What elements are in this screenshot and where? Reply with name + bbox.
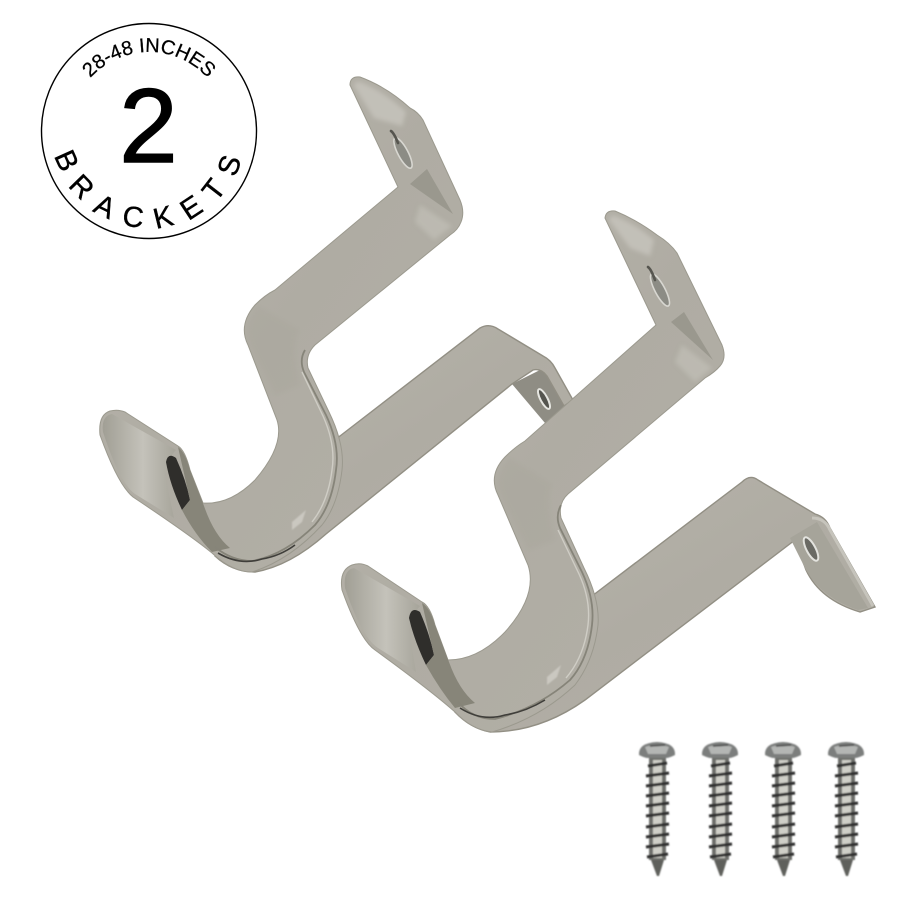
bracket 1 hook slot	[166, 456, 190, 510]
screw 1	[639, 742, 675, 876]
bracket 2 hole shadow	[648, 267, 655, 280]
bracket 1 (left)	[100, 77, 573, 572]
bracket 2 inner rim	[458, 505, 593, 719]
badge top text: 28-48 INCHES	[82, 38, 216, 78]
bracket 2 tip band	[422, 603, 475, 708]
bracket 2 bend shading	[498, 458, 555, 550]
bracket 1 bottom shadow line	[218, 545, 295, 561]
bracket 1 hook tip sheen	[103, 414, 176, 518]
screw 4	[828, 742, 864, 876]
bracket 2 rim highlight	[558, 530, 589, 678]
bracket 2 bottom shadow line	[460, 700, 545, 717]
bracket 1 flange hole	[391, 136, 415, 170]
bracket 1 bend shading	[247, 306, 300, 395]
bracket 2 hook tip sheen	[345, 568, 420, 672]
badge circle	[42, 24, 256, 238]
bracket 1 rear flange	[512, 364, 573, 423]
screw 3	[765, 742, 801, 876]
bracket 2 rear flange face	[790, 522, 868, 610]
bracket 2 inner surface highlight	[547, 665, 561, 685]
bracket 2 rear strip	[455, 477, 875, 732]
screw 2	[702, 742, 738, 876]
bracket 2 rear flange edge	[812, 518, 873, 606]
bracket 1 rim highlight	[302, 372, 333, 522]
badge number: 2	[119, 68, 178, 185]
bracket 2 flange shadow	[671, 312, 713, 360]
bracket 2 front hook and arm	[341, 211, 724, 732]
bracket 2 rear hole	[801, 535, 821, 563]
bracket 1 inner surface highlight	[292, 510, 306, 530]
bracket 2 (right)	[341, 211, 875, 732]
bracket 1 flange top facet	[354, 82, 406, 126]
bracket 1 rear strip	[215, 326, 573, 572]
bracket 1 flange shadow	[410, 169, 453, 214]
bracket 2 flange fold highlight	[675, 345, 712, 382]
bracket 1 tip band	[178, 447, 230, 552]
bracket 1 hole shadow	[391, 131, 398, 143]
bracket 2 hook slot	[409, 610, 434, 665]
bracket 1 flange fold highlight	[415, 205, 452, 240]
bracket 1 inner rim	[215, 350, 337, 561]
bracket 2 flange hole	[647, 272, 673, 308]
bracket 1 front hook and arm	[100, 77, 463, 572]
badge: 2 brackets, 28-48 inches	[40, 22, 258, 240]
bracket 1 rear hole	[536, 388, 552, 410]
bracket 2 flange top facet	[609, 216, 654, 256]
badge bottom text: BRACKETS	[54, 150, 240, 229]
